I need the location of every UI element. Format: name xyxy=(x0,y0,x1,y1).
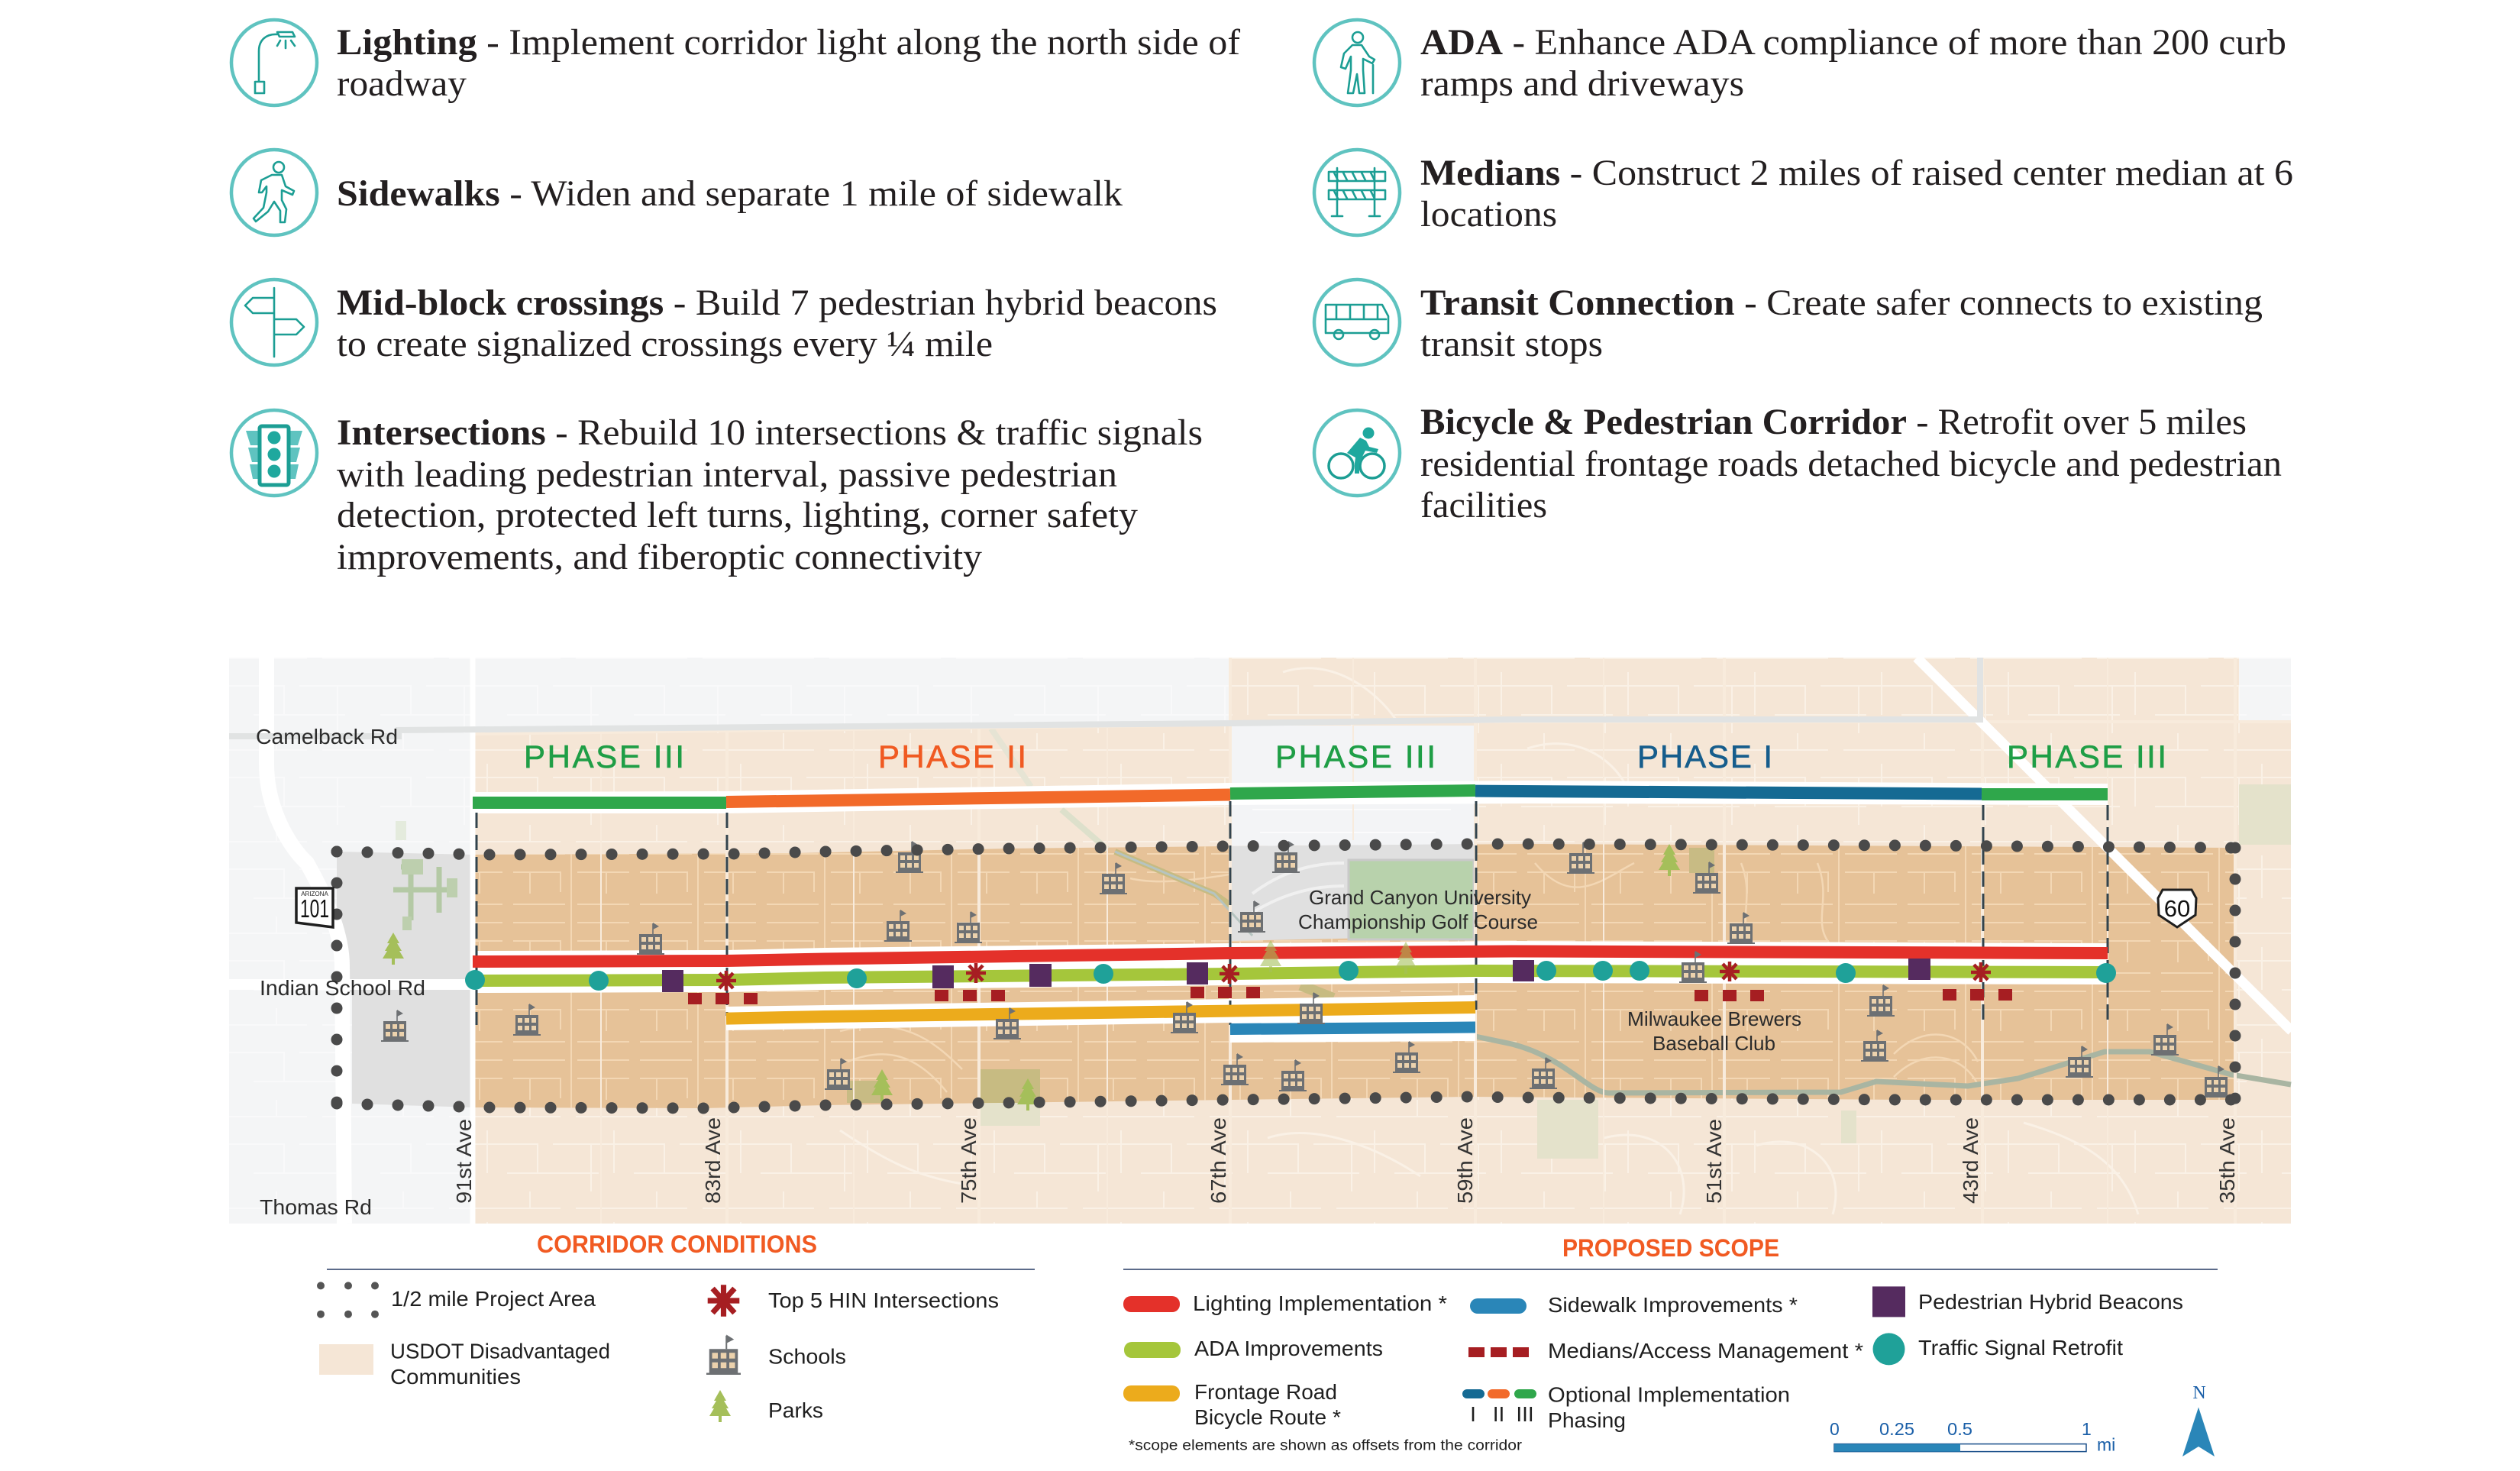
medians label: Medians/Access Management * xyxy=(1548,1339,1863,1363)
phase divider dashed lines xyxy=(477,801,2108,1025)
frontage label xyxy=(1194,1380,1341,1429)
medians swatch xyxy=(1468,1347,1529,1357)
icon: lighting xyxy=(231,20,317,105)
text: ADA: ADA - Enhance ADA compliance of more than 200 curb xyxy=(1420,22,2286,63)
icon: sidewalks pedestrian xyxy=(231,150,317,235)
frontage road bicycle route bar xyxy=(726,1007,1475,1019)
road labels: Thomas Rd xyxy=(260,1195,372,1219)
shield: Arizona 101: 101 xyxy=(300,894,329,923)
avenue labels: 91st Ave xyxy=(452,1119,476,1204)
avenue labels: 59th Ave xyxy=(1453,1117,1477,1204)
lighting implementation bar xyxy=(473,952,2108,962)
avenue labels: 51st Ave xyxy=(1702,1119,1726,1204)
sidewalk improvements bar xyxy=(1230,1027,1475,1030)
landmark labels: Championship Golf Course xyxy=(1298,910,1538,933)
landmark labels xyxy=(1298,886,1801,1055)
text: bicycle and pedestrian corridor: facilities xyxy=(1420,485,1547,525)
beacon swatch xyxy=(1872,1286,1905,1317)
text: ADA xyxy=(1420,22,2286,104)
map: corridor basemap and overlays xyxy=(229,658,2292,1224)
text: sidewalks: Sidewalks - Widen and separate 1 mile of sidewalk xyxy=(337,173,1123,214)
road labels xyxy=(256,725,425,1219)
pedestrian hybrid beacons xyxy=(662,959,1930,992)
legend: corridor conditions xyxy=(317,1230,1035,1422)
signal swatch xyxy=(1872,1333,1905,1365)
basemap: arterial streets xyxy=(473,658,2291,1224)
text: intersections: with leading pedestrian interval, passive pedestrian xyxy=(337,454,1117,495)
white halos behind bars xyxy=(473,781,2108,1043)
avenue labels: 75th Ave xyxy=(957,1117,981,1204)
shield: US 60: 60 xyxy=(2164,895,2190,922)
disadvantaged communities label: Communities xyxy=(390,1365,521,1389)
heading: PROPOSED SCOPE xyxy=(1562,1234,1779,1262)
project area dotted boundary xyxy=(337,844,2235,1108)
landmark labels: Grand Canyon University xyxy=(1309,886,1531,909)
north arrow xyxy=(2182,1383,2215,1456)
phasing swatches xyxy=(1462,1389,1536,1426)
sidewalk swatch xyxy=(1470,1298,1527,1314)
basemap: project area shading xyxy=(337,844,2235,1108)
phase labels: PHASE I xyxy=(1637,739,1772,774)
park symbol xyxy=(709,1390,731,1422)
basemap: park and golf course xyxy=(847,848,1714,1103)
phasing label xyxy=(1548,1383,1790,1432)
text: medians: locations xyxy=(1420,194,1557,234)
disadvantaged communities label: USDOT Disadvantaged xyxy=(390,1340,610,1363)
phasing swatches: III xyxy=(1516,1402,1534,1426)
HIN symbol xyxy=(708,1285,739,1317)
lighting swatch xyxy=(1123,1296,1180,1312)
phase labels: PHASE III xyxy=(524,739,684,774)
frontage swatch xyxy=(1123,1385,1180,1401)
signal label: Traffic Signal Retrofit xyxy=(1918,1336,2123,1359)
panel: right column of scope items xyxy=(1314,20,2293,525)
schools xyxy=(381,841,2230,1098)
ADA improvements bar xyxy=(473,971,2108,981)
icon: mid-block signpost xyxy=(231,280,317,365)
avenue labels: 43rd Ave xyxy=(1959,1117,1982,1204)
text: intersections: improvements, and fiberoptic connectivity xyxy=(337,537,982,577)
basemap: gray land xyxy=(229,658,2291,1224)
footnote: *scope elements are shown as offsets from the corridor xyxy=(1129,1437,1523,1453)
school label: Schools xyxy=(768,1344,846,1369)
icon: bicycle rider xyxy=(1314,410,1400,496)
HIN label: Top 5 HIN Intersections xyxy=(768,1288,999,1312)
basemap: disadvantaged communities tint xyxy=(473,658,2291,1224)
phasing swatches: II xyxy=(1493,1402,1504,1426)
basemap: canals xyxy=(991,729,2291,1093)
phasing label: Phasing xyxy=(1548,1408,1626,1432)
legend: proposed scope xyxy=(1123,1234,2218,1456)
landmark labels: Baseball Club xyxy=(1653,1032,1775,1055)
phase bars xyxy=(473,790,2108,803)
road labels: Indian School Rd xyxy=(260,976,425,1000)
scale bar: 0.25 xyxy=(1879,1419,1914,1439)
scale bar xyxy=(1830,1419,2115,1454)
HIN intersections xyxy=(716,962,1991,991)
heading: CORRIDOR CONDITIONS xyxy=(537,1230,817,1258)
basemap: freeways and main roads xyxy=(229,658,2292,1224)
lighting label: Lighting Implementation * xyxy=(1193,1292,1447,1315)
text: mid-block crossings: to create signalized crossings every ¼ mile xyxy=(337,324,993,364)
icon: median barricade xyxy=(1314,150,1400,235)
text: lighting xyxy=(337,22,1240,104)
avenue labels: 83rd Ave xyxy=(701,1117,725,1204)
basemap: campus paths in the gray area xyxy=(393,821,457,930)
project area symbol xyxy=(317,1282,379,1318)
avenue labels: 67th Ave xyxy=(1207,1117,1230,1204)
text: ADA: ramps and driveways xyxy=(1420,63,1744,104)
icon: traffic signal xyxy=(231,410,317,496)
disadvantaged communities label xyxy=(390,1340,610,1389)
text: bicycle and pedestrian corridor: Bicycle & Pedestrian Corridor - Retrofit over 5 miles xyxy=(1420,402,2247,442)
scale bar: 0.5 xyxy=(1947,1419,1972,1439)
text: intersections xyxy=(337,412,1203,577)
panel: left column of scope items xyxy=(231,20,1240,577)
basemap: light park areas outside project area xyxy=(979,784,2291,1159)
text: mid-block crossings xyxy=(337,283,1217,364)
road labels: Camelback Rd xyxy=(256,725,398,748)
text: medians: Medians - Construct 2 miles of raised center median at 6 xyxy=(1420,153,2293,193)
icon: ADA person with cane xyxy=(1314,20,1400,105)
phase labels: PHASE III xyxy=(2007,739,2166,774)
text: lighting: roadway xyxy=(337,63,467,104)
landmark labels: Milwaukee Brewers xyxy=(1627,1007,1801,1030)
text: medians xyxy=(1420,153,2293,234)
disadvantaged communities swatch xyxy=(319,1344,373,1375)
text: lighting: Lighting - Implement corridor light along the north side of xyxy=(337,22,1240,63)
project area label: 1/2 mile Project Area xyxy=(391,1287,596,1311)
phase labels xyxy=(524,739,2166,774)
frontage label: Frontage Road xyxy=(1194,1380,1337,1404)
text: transit connection: Transit Connection - Create safer connects to existing xyxy=(1420,283,2263,323)
park label: Parks xyxy=(768,1398,823,1422)
medians xyxy=(688,987,2012,1004)
phase labels: PHASE II xyxy=(878,739,1026,774)
shield: Arizona 101 xyxy=(296,888,333,927)
icon: bus xyxy=(1314,280,1400,365)
phasing label: Optional Implementation xyxy=(1548,1383,1790,1407)
phasing swatches: I xyxy=(1470,1402,1476,1426)
scale bar: 1 xyxy=(2082,1419,2092,1439)
school symbol xyxy=(706,1335,741,1375)
ADA label: ADA Improvements xyxy=(1194,1337,1383,1360)
scale bar: mi xyxy=(2097,1434,2115,1454)
text: bicycle and pedestrian corridor xyxy=(1420,402,2282,525)
shield: US 60 xyxy=(2158,890,2196,927)
text: transit connection: transit stops xyxy=(1420,324,1603,364)
text: mid-block crossings: Mid-block crossings - Build 7 pedestrian hybrid beacons xyxy=(337,283,1217,323)
avenue labels: 35th Ave xyxy=(2215,1117,2239,1204)
text: intersections: Intersections - Rebuild 10 intersections & traffic signals xyxy=(337,412,1203,453)
sidewalk label: Sidewalk Improvements * xyxy=(1548,1293,1798,1317)
avenue labels xyxy=(452,1117,2239,1204)
frontage label: Bicycle Route * xyxy=(1194,1405,1341,1429)
phase labels: PHASE III xyxy=(1275,739,1436,774)
traffic signal retrofits xyxy=(465,961,2116,991)
beacon label: Pedestrian Hybrid Beacons xyxy=(1918,1290,2183,1314)
shield: Arizona 101: ARIZONA xyxy=(301,891,328,897)
north arrow: N xyxy=(2192,1383,2206,1403)
text: transit connection xyxy=(1420,283,2263,364)
text: bicycle and pedestrian corridor: residential frontage roads detached bicycle and pedestrian xyxy=(1420,444,2282,484)
ADA swatch xyxy=(1124,1342,1181,1358)
parks trees xyxy=(383,844,1680,1111)
text: intersections: detection, protected left turns, lighting, corner safety xyxy=(337,495,1138,535)
scale bar: 0 xyxy=(1830,1419,1840,1439)
